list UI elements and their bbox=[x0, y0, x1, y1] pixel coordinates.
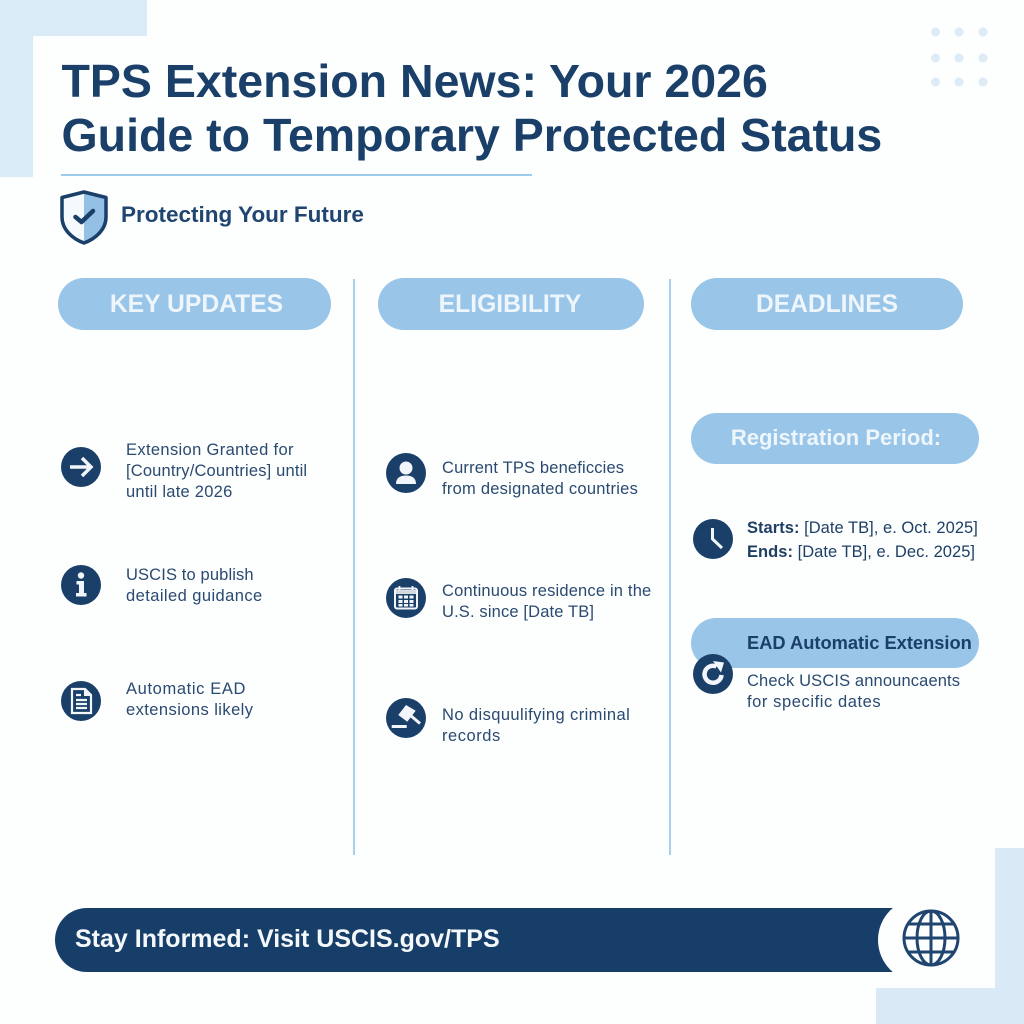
icon: gavel bbox=[386, 698, 426, 738]
heading: key updates bbox=[58, 278, 331, 330]
text: EAD: Automatic EAD bbox=[126, 680, 246, 698]
title: Guide to Temporary Protected Status bbox=[62, 109, 882, 161]
item: EAD bbox=[61, 680, 253, 721]
heading: registration period bbox=[691, 413, 979, 464]
text: residence bbox=[442, 582, 651, 621]
heading: eligibility: ELIGIBILITY bbox=[439, 291, 581, 318]
icon: clock bbox=[693, 519, 733, 559]
text: extension granted: [Country/Countries] until bbox=[126, 462, 307, 480]
text: residence: Continuous residence in the bbox=[442, 582, 651, 600]
heading: deadlines: DEADLINES bbox=[756, 291, 898, 318]
text: guidance: USCIS to publish bbox=[126, 566, 254, 584]
text: dates: Ends: [Date TB], e. Dec. 2025] bbox=[747, 543, 975, 561]
item: beneficiaries bbox=[386, 453, 638, 498]
column divider bbox=[353, 279, 355, 855]
text: beneficiaries: from designated countries bbox=[442, 480, 638, 498]
item: residence bbox=[386, 578, 651, 621]
decorative corner top left bbox=[0, 0, 147, 177]
icon: arrow bbox=[61, 447, 101, 487]
item: criminal records bbox=[386, 698, 630, 745]
text: criminal records: records bbox=[442, 727, 501, 745]
subtitle: Protecting Your Future bbox=[121, 202, 364, 227]
white title backing bbox=[33, 36, 147, 177]
item: guidance bbox=[61, 565, 263, 605]
icon: calendar bbox=[386, 578, 426, 618]
heading: deadlines bbox=[691, 278, 963, 330]
text: guidance: detailed guidance bbox=[126, 587, 263, 605]
text: dates: Starts: [Date TB], e. Oct. 2025] bbox=[747, 519, 978, 537]
heading: registration period: Registration Period: bbox=[731, 425, 941, 450]
footer notch bbox=[878, 898, 962, 982]
icon: shield with check bbox=[60, 190, 108, 245]
text: extension granted bbox=[126, 441, 307, 501]
text: extension granted: until late 2026 bbox=[126, 483, 232, 501]
icon: info bbox=[61, 565, 101, 605]
text: check USCIS: for specific dates bbox=[747, 693, 881, 711]
footer banner: Stay Informed: Visit USCIS.gov/TPS bbox=[75, 925, 500, 953]
text: EAD bbox=[126, 680, 253, 719]
icon: document bbox=[61, 681, 101, 721]
title: TPS Extension News: Your 2026 bbox=[62, 55, 768, 107]
heading: eligibility bbox=[378, 278, 644, 330]
text: residence: U.S. since [Date TB] bbox=[442, 603, 594, 621]
heading: key updates: KEY UPDATES bbox=[110, 291, 283, 318]
item: dates bbox=[693, 519, 978, 561]
footer banner bbox=[55, 908, 895, 972]
title underline bbox=[61, 174, 532, 176]
icon: person bbox=[386, 453, 426, 493]
heading: EAD automatic extension: EAD Automatic Extension bbox=[747, 632, 972, 653]
text: beneficiaries: Current TPS beneficcies bbox=[442, 459, 624, 477]
text: criminal records: No disquulifying criminal bbox=[442, 706, 630, 724]
decorative corner bottom right bbox=[876, 848, 1024, 1024]
text: check USCIS bbox=[747, 672, 960, 711]
text: criminal records bbox=[442, 706, 630, 745]
column divider bbox=[669, 279, 671, 855]
item: extension granted bbox=[61, 441, 307, 501]
title bbox=[62, 55, 882, 161]
text: check USCIS: Check USCIS announcaents bbox=[747, 672, 960, 690]
text: dates bbox=[747, 519, 978, 561]
white footer backing bbox=[876, 848, 995, 988]
icon: refresh bbox=[693, 654, 733, 694]
heading: EAD automatic extension bbox=[691, 618, 979, 668]
text: guidance bbox=[126, 566, 263, 605]
text: EAD: extensions likely bbox=[126, 701, 253, 719]
item: check USCIS bbox=[693, 654, 960, 711]
icon: globe bbox=[902, 910, 960, 966]
text: extension granted: Extension Granted for bbox=[126, 441, 294, 459]
decorative dot grid bbox=[931, 28, 988, 86]
text: beneficiaries bbox=[442, 459, 638, 498]
